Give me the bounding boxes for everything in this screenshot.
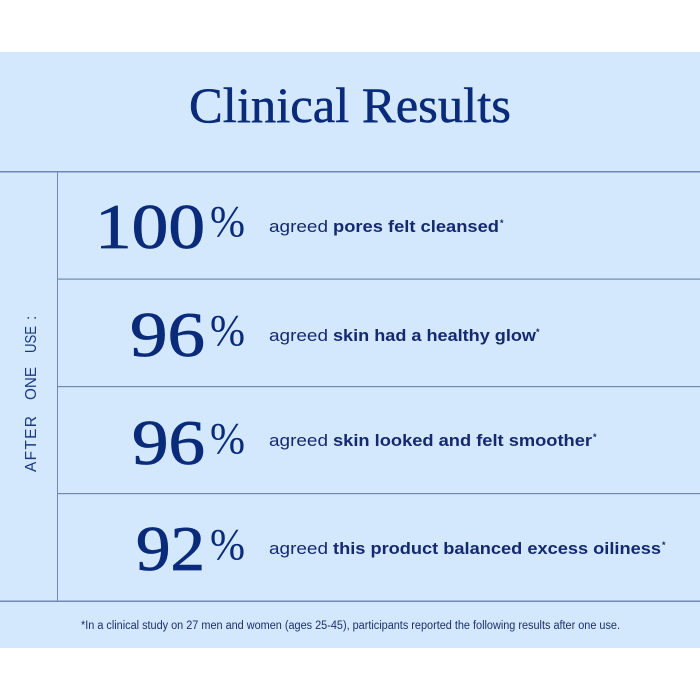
row 2: 96% healthy glow: skin had a healthy glow xyxy=(333,326,537,345)
row 4: 92% oiliness: % xyxy=(210,520,245,569)
row 1: 100% pores felt cleansed: * xyxy=(500,218,504,228)
row 2: 96% healthy glow xyxy=(130,299,540,370)
side label: after one use: USE xyxy=(23,326,40,353)
side label: after one use: AFTER xyxy=(23,416,40,472)
side label: after one use xyxy=(23,316,40,472)
row 4: 92% oiliness: this product balanced excess oiliness xyxy=(333,539,661,558)
row 3: 96% smoother: * xyxy=(593,432,597,442)
row 1: 100% pores felt cleansed xyxy=(95,191,504,262)
side label: after one use: : xyxy=(23,316,40,320)
row 1: 100% pores felt cleansed: 100 xyxy=(95,191,205,262)
row 2: 96% healthy glow: % xyxy=(210,306,245,355)
row 1: 100% pores felt cleansed: pores felt cleansed xyxy=(333,217,499,236)
row 1: 100% pores felt cleansed: % xyxy=(210,197,245,246)
row 3: 96% smoother: agreed xyxy=(269,431,328,450)
footnote: *In a clinical study on 27 men and women (ages 25-45), participants reported the following results after one use. xyxy=(81,620,620,632)
row 2: 96% healthy glow: 96 xyxy=(130,299,205,370)
row 4: 92% oiliness: agreed xyxy=(269,539,328,558)
row 1: 100% pores felt cleansed: agreed xyxy=(269,217,328,236)
row 4: 92% oiliness: 92 xyxy=(136,513,205,584)
row 3: 96% smoother: 96 xyxy=(132,407,205,478)
row 4: 92% oiliness: * xyxy=(662,540,666,550)
row 2: 96% healthy glow: * xyxy=(536,327,540,337)
row 4: 92% oiliness xyxy=(136,513,666,584)
row 3: 96% smoother: % xyxy=(210,414,245,463)
side label: after one use: ONE xyxy=(23,367,40,400)
row 3: 96% smoother: skin looked and felt smoother xyxy=(333,431,592,450)
title: Clinical Results xyxy=(189,77,511,133)
row 2: 96% healthy glow: agreed xyxy=(269,326,328,345)
row 3: 96% smoother xyxy=(132,407,597,478)
